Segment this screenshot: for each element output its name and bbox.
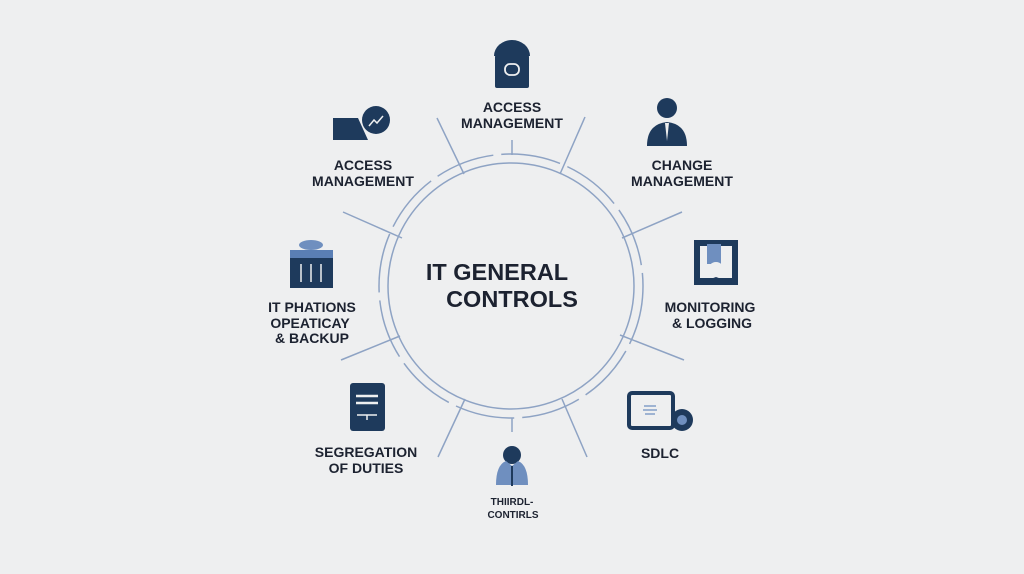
label: IT operations bbox=[268, 299, 356, 346]
icon: lock (top) bbox=[494, 40, 530, 88]
label: access management left bbox=[312, 157, 414, 189]
label: change management bbox=[631, 157, 733, 189]
label: segregation of duties: OF DUTIES bbox=[329, 460, 403, 476]
label: access management left: ACCESS bbox=[334, 157, 392, 173]
label: IT operations: & BACKUP bbox=[275, 330, 349, 346]
icon: third party person bbox=[496, 446, 528, 486]
label: change management: MANAGEMENT bbox=[631, 173, 733, 189]
label: third party controls: CONTIRLS bbox=[487, 510, 539, 521]
label: IT operations: IT PHATIONS bbox=[268, 299, 356, 315]
label: access management left: MANAGEMENT bbox=[312, 173, 414, 189]
label: third party controls: THIIRDL- bbox=[491, 497, 533, 508]
label: change management: CHANGE bbox=[652, 157, 712, 173]
label: segregation of duties: SEGREGATION bbox=[315, 444, 417, 460]
label: monitoring & logging: & LOGGING bbox=[672, 315, 752, 331]
center title: CONTROLS bbox=[446, 286, 578, 312]
label: monitoring & logging: MONITORING bbox=[665, 299, 755, 315]
icon: monitoring bbox=[694, 240, 738, 285]
icon: document bbox=[350, 383, 385, 431]
label: monitoring & logging bbox=[665, 299, 755, 331]
center title bbox=[426, 259, 578, 312]
label: access management top bbox=[461, 99, 563, 131]
label: SDLC: SDLC bbox=[641, 445, 679, 461]
central ring diagram bbox=[341, 117, 684, 457]
label: third party controls bbox=[487, 497, 539, 521]
label: IT operations: OPEATICAY bbox=[270, 315, 350, 331]
label: segregation of duties bbox=[315, 444, 417, 476]
icon: person in suit bbox=[647, 98, 687, 146]
center title: IT GENERAL bbox=[426, 259, 568, 285]
label: access management top: MANAGEMENT bbox=[461, 115, 563, 131]
icon: monitor with gear bbox=[629, 393, 693, 431]
icon: card with check (left top) bbox=[333, 106, 390, 140]
icon: server building bbox=[290, 240, 333, 288]
label: access management top: ACCESS bbox=[483, 99, 541, 115]
